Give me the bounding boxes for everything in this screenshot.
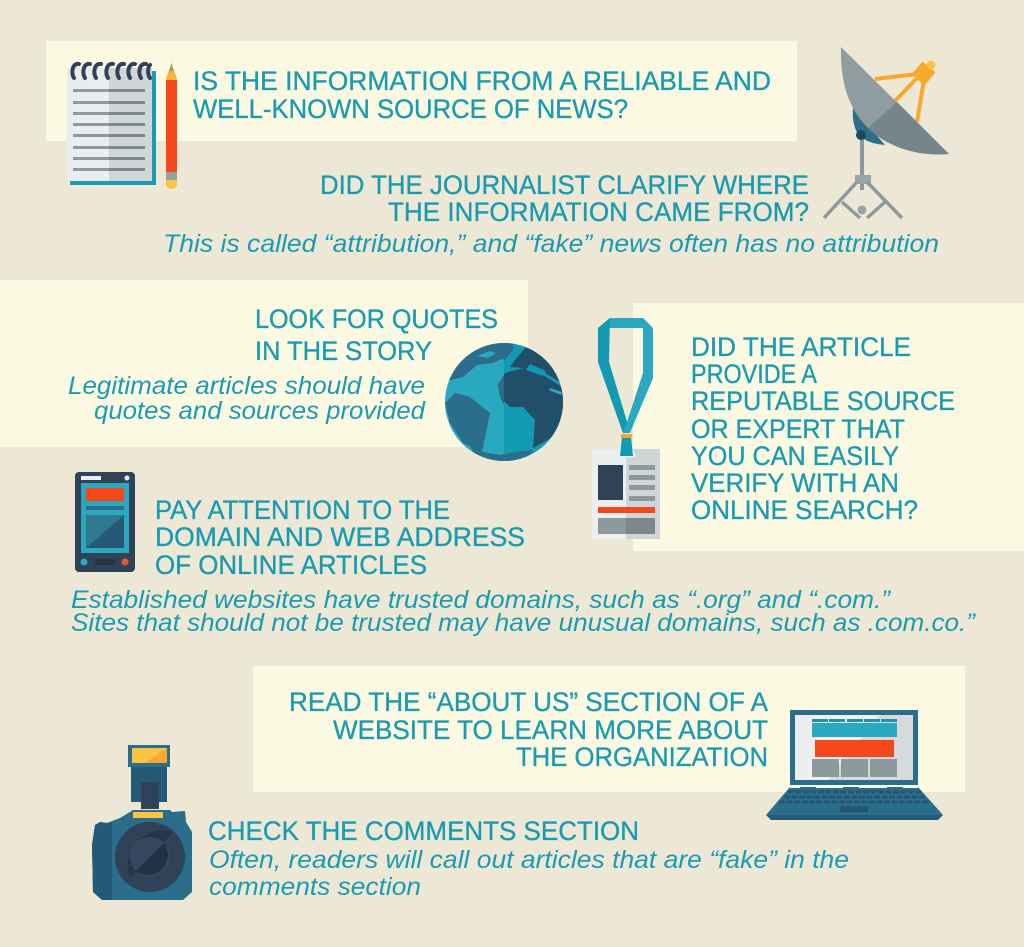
title: reliable source: WELL-KNOWN SOURCE OF NEWS? <box>193 94 628 124</box>
text: journalist attribution <box>163 170 939 258</box>
icon: globe <box>445 343 563 461</box>
title: reliable source: IS THE INFORMATION FROM A RELIABLE AND <box>193 66 771 96</box>
text: reputable source question: OR EXPERT THAT <box>691 414 905 444</box>
text: comments section: CHECK THE COMMENTS SECTION <box>208 816 639 846</box>
icon: camera <box>92 745 192 900</box>
icon: id badge with lanyard <box>592 318 660 539</box>
text: look for quotes: quotes and sources provided <box>94 397 426 425</box>
icon: smartphone <box>75 472 135 572</box>
text: reputable source question: PROVIDE A <box>691 359 817 389</box>
text: comments section: comments section <box>209 873 421 901</box>
text: domain and web address: PAY ATTENTION TO THE <box>155 495 450 525</box>
text: domain and web address: DOMAIN AND WEB ADDRESS <box>155 522 525 552</box>
text: reputable source question: YOU CAN EASILY <box>691 441 899 471</box>
text: journalist attribution: This is called “attribution,” and “fake” news often has no attribution <box>163 230 939 258</box>
text: reputable source question: VERIFY WITH AN <box>691 468 899 498</box>
text: reputable source question <box>691 332 955 525</box>
text: about us: READ THE “ABOUT US” SECTION OF A <box>289 687 768 717</box>
icon: satellite dish <box>824 47 949 218</box>
text: look for quotes: Legitimate articles should have <box>68 372 425 400</box>
icon: laptop <box>766 710 943 820</box>
text: look for quotes: LOOK FOR QUOTES <box>255 304 498 334</box>
text: journalist attribution: THE INFORMATION CAME FROM? <box>388 197 809 227</box>
text: reputable source question: REPUTABLE SOURCE <box>691 386 955 416</box>
text: domain and web address: OF ONLINE ARTICLES <box>155 550 427 580</box>
text: journalist attribution: DID THE JOURNALIST CLARIFY WHERE <box>320 170 809 200</box>
text: comments section <box>208 816 849 901</box>
icon: notepad <box>67 64 156 185</box>
icon: pencil <box>166 63 177 189</box>
title: reliable source <box>193 66 771 124</box>
text: domain and web address <box>71 495 977 637</box>
text: about us: THE ORGANIZATION <box>516 742 768 772</box>
text: look for quotes <box>68 304 498 425</box>
text: about us <box>289 687 768 772</box>
text: reputable source question: DID THE ARTICLE <box>691 332 911 362</box>
text: domain and web address: Sites that should not be trusted may have unusual domains, such as .com.co.” <box>71 609 977 637</box>
text: look for quotes: IN THE STORY <box>255 336 432 366</box>
text: reputable source question: ONLINE SEARCH? <box>691 495 918 525</box>
text: comments section: Often, readers will call out articles that are “fake” in the <box>209 846 849 874</box>
text: about us: WEBSITE TO LEARN MORE ABOUT <box>333 715 768 745</box>
text: domain and web address: Established websites have trusted domains, such as “.org” and “.com.” <box>71 586 892 614</box>
